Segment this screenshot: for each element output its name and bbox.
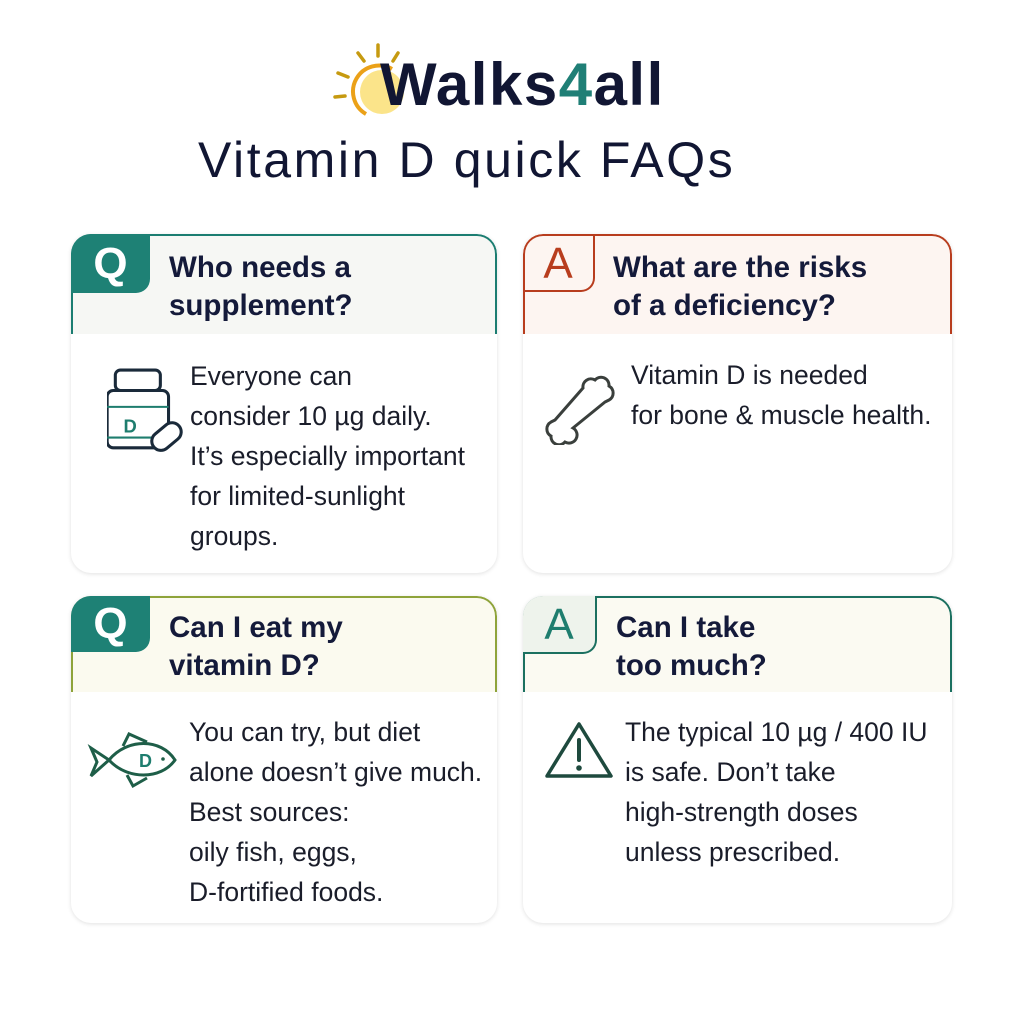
icon: warning xyxy=(545,722,613,778)
heading: supplement? xyxy=(169,289,353,322)
heading: Can I take xyxy=(616,611,755,644)
badge A xyxy=(523,234,595,292)
body text: Vitamin D is needed xyxy=(631,360,868,390)
heading: of a deficiency? xyxy=(613,289,836,322)
icon: sun xyxy=(333,43,404,116)
icon: pill bottle: D xyxy=(124,415,137,436)
title: Vitamin D quick FAQs xyxy=(198,132,735,188)
header xyxy=(523,234,952,334)
badge Q xyxy=(71,596,150,652)
body text: D-fortified foods. xyxy=(189,877,383,907)
body text: for limited-sunlight xyxy=(190,481,405,511)
body text: groups. xyxy=(190,521,278,551)
icon: fish: D xyxy=(139,751,152,771)
body text xyxy=(631,360,932,430)
body text: consider 10 µg daily. xyxy=(190,401,432,431)
badge Q: Q xyxy=(93,599,128,648)
badge A xyxy=(523,596,597,654)
heading xyxy=(616,611,767,682)
body text: alone doesn’t give much. xyxy=(189,757,482,787)
body text: Everyone can xyxy=(190,361,352,391)
heading: too much? xyxy=(616,649,767,682)
icon: pill bottle xyxy=(107,368,183,452)
heading xyxy=(169,251,353,322)
heading: vitamin D? xyxy=(169,649,320,682)
panel: can I take too much xyxy=(523,596,952,923)
body text: Best sources: xyxy=(189,797,350,827)
body text: for bone & muscle health. xyxy=(631,400,932,430)
icon: bone xyxy=(545,376,615,445)
heading: Who needs a xyxy=(169,251,351,284)
heading: What are the risks xyxy=(613,251,867,284)
body text: It’s especially important xyxy=(190,441,465,471)
body text: is safe. Don’t take xyxy=(625,757,836,787)
badge Q xyxy=(71,234,150,293)
heading: Can I eat my xyxy=(169,611,343,644)
panel: who needs a supplement xyxy=(71,234,497,573)
heading xyxy=(169,611,343,682)
header xyxy=(71,234,497,334)
logo xyxy=(333,43,665,118)
icon: fish xyxy=(88,732,177,788)
body text: You can try, but diet xyxy=(189,717,420,747)
badge A: A xyxy=(544,600,574,649)
body text: unless prescribed. xyxy=(625,837,840,867)
body text xyxy=(189,717,482,907)
logo text: Walks4all xyxy=(380,51,665,118)
body text xyxy=(625,717,928,867)
header xyxy=(71,596,497,692)
body text xyxy=(190,361,465,551)
badge Q: Q xyxy=(93,239,128,288)
body text: The typical 10 µg / 400 IU xyxy=(625,717,928,747)
badge A: A xyxy=(543,239,573,288)
body text: high-strength doses xyxy=(625,797,858,827)
panel: can I eat my vitamin D xyxy=(71,596,497,923)
heading xyxy=(613,251,867,322)
panel: risks of deficiency xyxy=(523,234,952,573)
header xyxy=(523,596,952,692)
body text: oily fish, eggs, xyxy=(189,837,357,867)
